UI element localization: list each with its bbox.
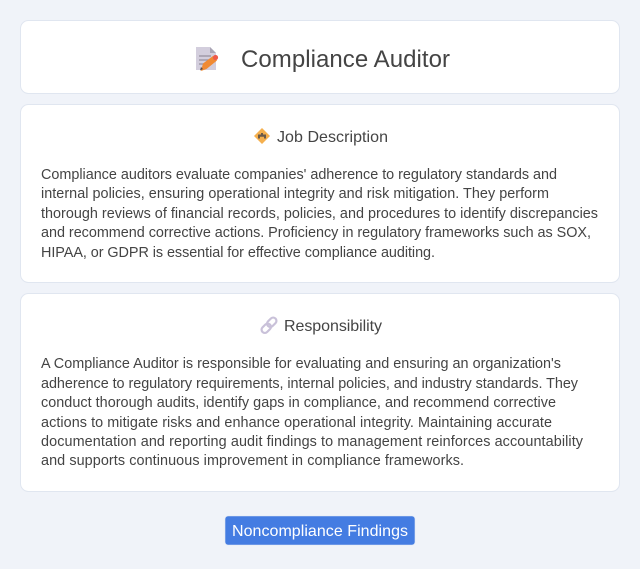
button: noncompliance findings: [225, 516, 415, 545]
button: noncompliance findings: Noncompliance Findings: [232, 523, 408, 540]
text block: responsibility: A Compliance Auditor is responsible for evaluating and ensuring an organization's: [41, 356, 561, 372]
panel: title card: [20, 20, 620, 94]
panel: responsibility: [20, 294, 620, 492]
text block: responsibility: documentation and reporting audit findings to management reinforces accountability: [41, 434, 584, 450]
text block: responsibility: adherence to regulatory requirements, internal policies, and industry standards. They: [41, 376, 579, 392]
text block: responsibility: [41, 356, 584, 469]
text block: job description: and recommend corrective actions. Proficiency in regulatory frameworks such as SOX,: [41, 225, 591, 241]
icon: document with pencil: [196, 47, 218, 71]
text block: job description: HIPAA, or GDPR is essential for effective compliance auditing.: [41, 245, 435, 261]
panel: job description: [20, 104, 620, 282]
heading: job description: Job Description: [277, 129, 388, 146]
text block: responsibility: conduct thorough audits, identify gaps in compliance, and recommend corrective: [41, 395, 556, 411]
text block: job description: [41, 167, 598, 261]
title: Compliance Auditor: [241, 46, 450, 73]
text block: responsibility: and supports continuous improvement in compliance frameworks.: [41, 453, 464, 469]
text block: job description: Compliance auditors evaluate companies' adherence to regulatory standards and: [41, 167, 557, 183]
icon: orange diamond: [254, 128, 270, 144]
icon: chain link: [260, 316, 278, 334]
text block: responsibility: actions to mitigate risks and enhance operational integrity. Maintaining accurate: [41, 415, 552, 431]
text block: job description: internal policies, ensuring operational integrity and risk mitigation. They perform: [41, 186, 549, 202]
text block: job description: thorough reviews of financial records, policies, and procedures to identify discrepancies: [41, 206, 598, 222]
heading: responsibility: Responsibility: [284, 318, 382, 335]
